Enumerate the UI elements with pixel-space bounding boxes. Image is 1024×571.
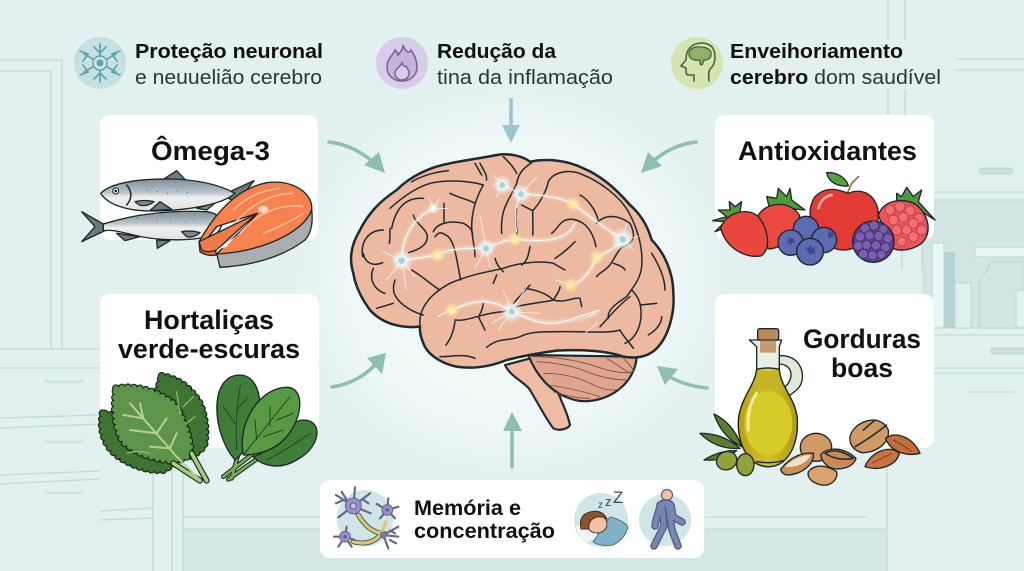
benefit: proteção neuronal: e neuuelião cerebro <box>135 67 322 89</box>
icon: olive oil bottle <box>700 329 802 476</box>
arrow: hortaliças to brain <box>332 353 386 387</box>
icon: walking person <box>639 490 691 546</box>
arrow: antioxidantes to brain <box>641 142 696 173</box>
panel: memória e concentração <box>320 480 704 558</box>
panel: hortaliças: verde-escuras <box>118 334 300 364</box>
icon: sleeping person: z <box>598 500 603 511</box>
heading: Antioxidantes <box>738 136 917 166</box>
neural network glow <box>383 175 638 333</box>
icon: neuron snowflake <box>74 37 126 89</box>
benefit: proteção neuronal <box>74 37 323 89</box>
icon: flame <box>376 37 428 89</box>
panel: memória e concentração: concentração <box>414 520 555 543</box>
brain illustration <box>351 154 674 430</box>
panel: antioxidantes <box>713 115 935 265</box>
panel: ômega-3 <box>82 115 318 267</box>
text: Proteção neuronal <box>135 41 323 63</box>
arrow: gorduras to brain <box>657 366 707 388</box>
benefit: envelhecimento saudável: cerebro dom saudível <box>730 67 941 89</box>
icon: spinach <box>217 375 317 479</box>
icon: kale <box>102 375 317 481</box>
arrow: ômega-3 to brain <box>329 142 385 173</box>
icon: neurons <box>334 487 398 548</box>
sulci <box>362 157 665 358</box>
heading: Gorduras <box>803 324 921 354</box>
icon: head with brain <box>671 37 723 89</box>
benefit: redução da inflamação: tina da inflamação <box>437 67 613 89</box>
icon: sleeping person: z <box>605 494 612 509</box>
panel: gorduras boas: boas <box>831 353 893 383</box>
heading: Hortaliças <box>144 305 274 335</box>
cerebrum <box>351 154 674 368</box>
icon: sleeping person: Z <box>613 488 623 507</box>
heading: Ômega-3 <box>151 135 270 166</box>
icon: fish and salmon <box>82 171 312 267</box>
icon: sleeping person <box>574 488 628 547</box>
brain stem <box>505 357 570 430</box>
icon: berries and apple <box>713 173 935 265</box>
benefit: redução da inflamação <box>376 37 613 89</box>
text: Memória e <box>414 497 521 520</box>
icon: nuts <box>781 420 920 485</box>
benefit: envelhecimento saudável <box>671 37 941 89</box>
panel: hortaliças <box>100 294 319 481</box>
text: Redução da <box>437 41 557 63</box>
cerebellum <box>528 355 637 401</box>
text: Enveihoriamento <box>730 41 903 63</box>
arrow: inflamação to brain <box>502 98 520 143</box>
arrow: memória to brain <box>503 412 522 468</box>
panel: gorduras boas <box>700 294 934 485</box>
